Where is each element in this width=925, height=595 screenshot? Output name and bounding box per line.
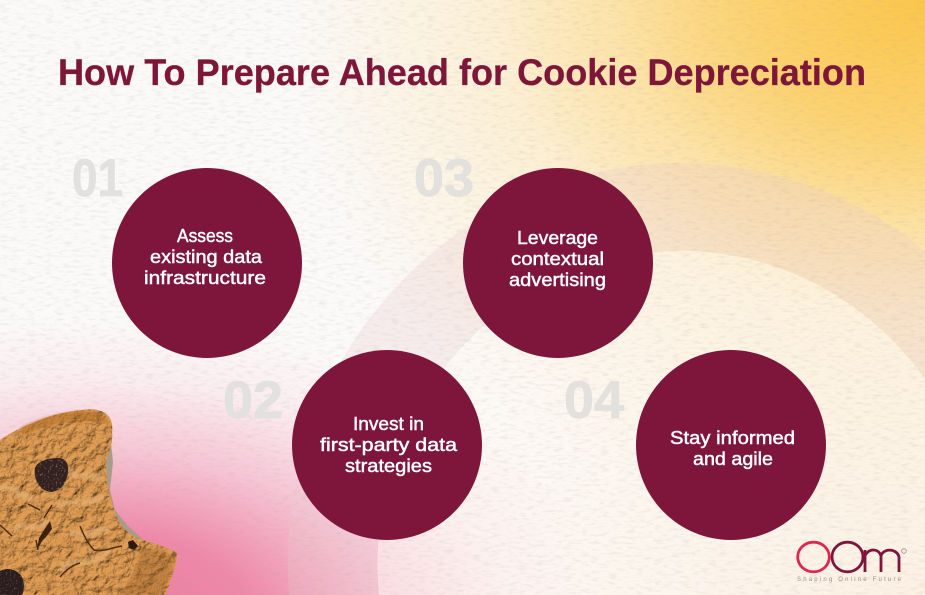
circle 02: invest in first-party data strategies: Invest in [353,413,424,434]
circle 01: assess existing data infrastructure: infrastructure [144,267,266,288]
circle 03: leverage contextual advertising: Leverage [517,227,598,248]
circle 02: invest in first-party data strategies: strategies [345,455,432,476]
cookie crumb: dark pit [128,540,138,550]
cookie cracks [0,504,122,577]
logo: OOm: Shaping Online Future [797,577,902,583]
circle 01: assess existing data infrastructure: Assess [177,225,233,246]
circle 03: leverage contextual advertising: advertising [509,269,606,290]
circle 03: leverage contextual advertising [463,168,653,358]
title: How To Prepare Ahead for Cookie Depreciation [58,52,866,93]
number 02: 02 [223,371,283,430]
logo: OOm [797,542,906,583]
circle 04: stay informed and agile [636,350,826,540]
circle 02: invest in first-party data strategies [292,350,482,540]
circle 01: assess existing data infrastructure [112,168,302,358]
chocolate chip [0,569,24,595]
circle 04: stay informed and agile: Stay informed [670,427,795,448]
cookie crack: dark fissure [37,521,52,550]
circle 03: leverage contextual advertising: contextual [511,248,604,269]
chocolate chip [35,458,68,492]
number 04: 04 [564,371,625,430]
circle 01: assess existing data infrastructure: existing data [150,246,263,267]
number 03: 03 [414,149,474,208]
circle 02: invest in first-party data strategies: first-party data [320,434,458,455]
decorative concentric arcs [288,163,925,595]
icon: bitten chocolate chip cookie [0,409,177,595]
number 01: 01 [72,149,123,208]
circle 04: stay informed and agile: and agile [693,448,773,469]
